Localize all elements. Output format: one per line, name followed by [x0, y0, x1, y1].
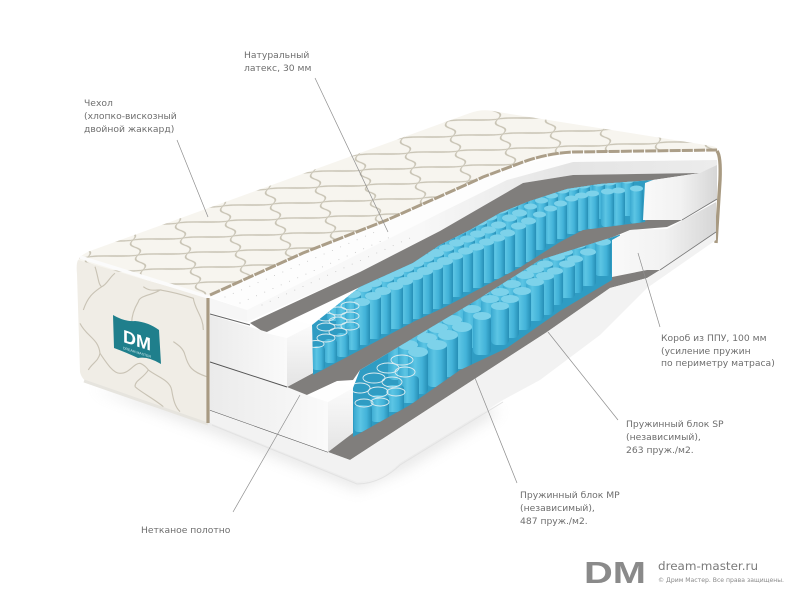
front panel of cover [77, 257, 208, 424]
mattress illustration [77, 110, 720, 490]
felt layer upper [250, 173, 700, 333]
bottom white layer [210, 232, 716, 484]
leader line: latex [315, 78, 388, 232]
label: foam box: Короб из ППУ, 100 мм [661, 333, 767, 344]
upper pocket spring block [312, 180, 653, 375]
label: cover: (хлопко-вискозный [84, 111, 177, 122]
quilted top cover [78, 110, 718, 296]
logo label on cover: DREAM MASTER [123, 346, 151, 359]
label: MP spring block: 487 пруж./м2. [520, 516, 588, 527]
leader line: cover [177, 140, 208, 217]
foam box rear lower [612, 199, 717, 277]
leader line: foam box [638, 253, 660, 327]
label: cover: двойной жаккард) [84, 124, 174, 135]
label: MP spring block: (независимый), [520, 503, 595, 514]
leader line: MP spring block [475, 378, 517, 483]
logo label on cover: DM [123, 325, 151, 355]
leader line: SP spring block [548, 332, 618, 420]
label: MP spring block: Пружинный блок MP [520, 490, 620, 501]
brand logo: DM [584, 555, 646, 590]
latex layer [210, 152, 720, 322]
label: foam box: (усиление пружин [661, 346, 751, 357]
label: SP spring block: 263 пруж./м2. [626, 445, 694, 456]
felt layer middle [287, 220, 682, 395]
label: SP spring block: (независимый), [626, 432, 701, 443]
label: cover: Чехол [84, 98, 113, 109]
label: SP spring block: Пружинный блок SP [626, 419, 724, 430]
leader line: non-woven fabric [233, 395, 300, 512]
label: foam box: по периметру матраса) [661, 358, 775, 369]
foam box front lower [210, 362, 353, 452]
website address: dream-master.ru [658, 559, 758, 573]
floor shadow [92, 388, 500, 490]
foam box rear upper [643, 165, 717, 220]
label: non-woven fabric: Нетканое полотно [141, 525, 231, 536]
lower pocket spring block [345, 224, 620, 440]
foam box front upper [210, 314, 313, 387]
logo label on cover [113, 315, 161, 364]
brown side edge [716, 151, 720, 243]
label: latex: латекс, 30 мм [244, 63, 311, 74]
copyright: © Дрим Мастер. Все права защищены. [658, 576, 784, 584]
felt layer lower [328, 270, 660, 460]
label: latex: Натуральный [244, 50, 309, 61]
